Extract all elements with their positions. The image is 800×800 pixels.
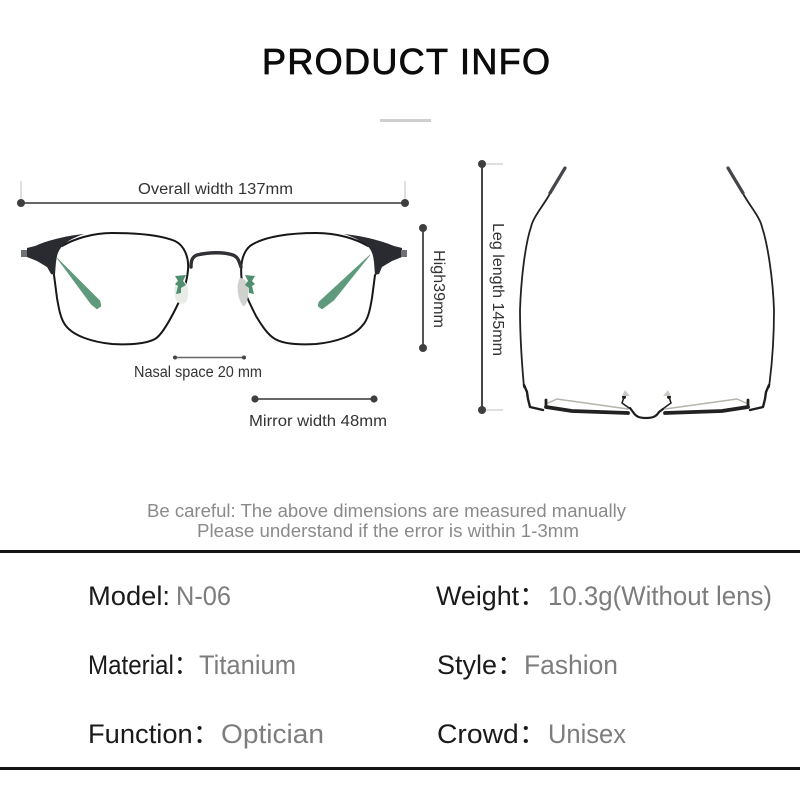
- left lens rim: [54, 233, 188, 344]
- disclaimer note: Be careful: The above dimensions are measured manually: [147, 500, 627, 521]
- title: PRODUCT INFO: [262, 41, 550, 82]
- spec: function: [88, 719, 324, 749]
- disclaimer note: [147, 500, 627, 541]
- lower rule: [0, 767, 800, 770]
- front view glasses: [21, 233, 407, 344]
- bridge from above: [630, 408, 663, 418]
- spec: model: Model:: [88, 581, 170, 611]
- left temple tip seen through lens: [57, 258, 101, 309]
- right hinge: [750, 385, 769, 410]
- right hinge tip: [401, 250, 407, 257]
- right lens rim: [241, 233, 375, 344]
- spec: style: Fashion: [524, 650, 618, 680]
- measurement: overall width: Overall width 137mm: [138, 181, 293, 198]
- spec: crowd: [437, 719, 626, 749]
- spec: weight: [436, 581, 772, 611]
- measurement: leg length: Leg length 145mm: [489, 223, 506, 356]
- right temple tip seen through lens: [318, 255, 370, 309]
- upper rule: [0, 550, 800, 553]
- spec: style: [437, 650, 618, 680]
- measurement: nasal space: Nasal space 20 mm: [134, 364, 262, 381]
- spec: model: [88, 581, 231, 611]
- spec: style: Style：: [437, 650, 524, 680]
- measurement: mirror width: [249, 395, 387, 430]
- right lens edge: [665, 407, 748, 413]
- nose pads from above: [622, 397, 671, 408]
- measurement: overall width: [17, 181, 409, 207]
- left end piece: [27, 234, 84, 275]
- measurement: height: [419, 224, 447, 352]
- spec: weight: 10.3g(Without lens): [548, 581, 772, 611]
- disclaimer note: Please understand if the error is within 1-3mm: [197, 520, 579, 541]
- left temple: [520, 168, 565, 387]
- spec: crowd: Crowd：: [437, 719, 547, 749]
- spec: weight: Weight：: [436, 581, 546, 611]
- nose pad left: [174, 279, 188, 304]
- measurement: nasal space: [134, 356, 262, 381]
- measurement: leg length: [478, 160, 506, 414]
- spec: function: Function：: [88, 719, 220, 749]
- title divider: [380, 119, 431, 122]
- top view glasses: [520, 168, 774, 418]
- spec: material: Titanium: [199, 650, 296, 680]
- measurement: mirror width: Mirror width 48mm: [249, 413, 387, 430]
- nose pad right: [238, 278, 249, 306]
- spec: material: [88, 650, 296, 680]
- spec: model: N-06: [176, 581, 231, 611]
- measurement: height: High39mm: [430, 250, 447, 328]
- right temple: [728, 168, 774, 387]
- right end piece: [344, 234, 402, 275]
- spec: crowd: Unisex: [548, 719, 626, 749]
- left lens edge: [546, 407, 628, 413]
- bridge: [191, 253, 241, 267]
- left hinge tip: [21, 250, 27, 257]
- spec: function: Optician: [221, 719, 324, 749]
- spec: material: Material：: [88, 650, 198, 680]
- left hinge: [524, 385, 543, 410]
